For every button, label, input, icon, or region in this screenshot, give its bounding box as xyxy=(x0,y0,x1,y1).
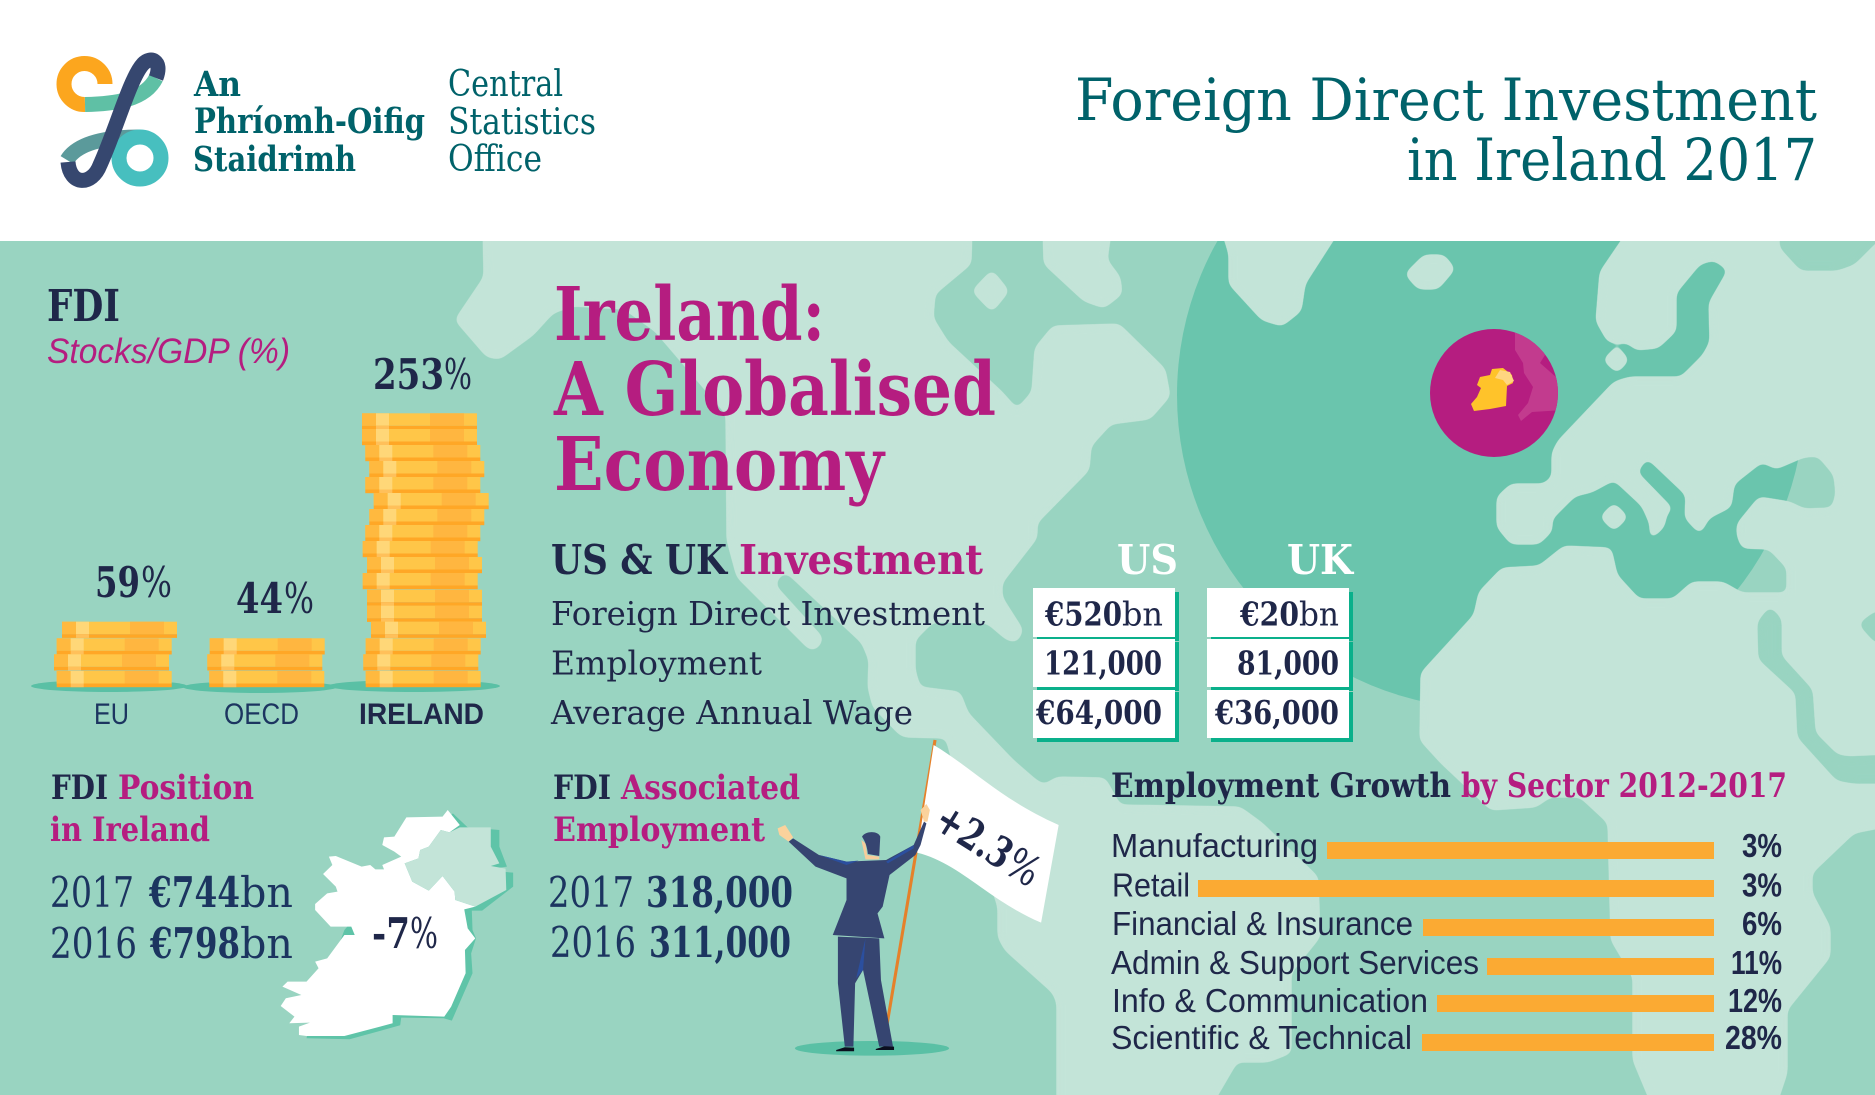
heading: FDI Associated Employment: Associated xyxy=(620,768,800,808)
heading: FDI Associated Employment: Employment xyxy=(553,810,765,850)
heading: FDI Position in Ireland: FDI xyxy=(51,768,108,808)
heading: FDI Position in Ireland: in Ireland xyxy=(50,810,210,850)
title: Foreign Direct Investment xyxy=(1075,66,1817,134)
title xyxy=(1075,66,1817,194)
logo text: Irish: Staidrimh xyxy=(193,139,356,180)
logo text: Irish xyxy=(193,64,425,180)
heading: US & UK Investment: Investment xyxy=(739,536,983,584)
coin stack: OECD xyxy=(207,638,325,687)
row: Manufacturing xyxy=(1111,827,1782,864)
row: Financial & Insurance xyxy=(1112,905,1782,942)
panel: FDI position in Ireland xyxy=(50,768,513,1039)
UK value boxes: 81,000 xyxy=(1237,644,1339,682)
stat: 2016: 311,000 xyxy=(649,918,791,967)
value: 253%: % xyxy=(444,350,472,399)
map: land masses xyxy=(455,225,1875,1095)
heading: FDI Associated Employment: FDI xyxy=(553,768,611,808)
UK value boxes: bn xyxy=(1299,594,1339,634)
stat: 2016: bn xyxy=(240,919,293,968)
value: 44%: 44 xyxy=(236,574,283,623)
heading: FDI: FDI xyxy=(47,281,120,332)
logo text: English xyxy=(448,64,596,180)
subheading: stocks/GDP: Stocks/GDP (%) xyxy=(47,332,290,371)
bar chart xyxy=(1111,827,1782,1056)
title: in Ireland 2017 xyxy=(1407,126,1817,194)
row: Info & Communication: 12% xyxy=(1728,982,1782,1019)
row: Financial & Insurance: Financial & Insurance xyxy=(1112,905,1413,942)
stat: 2017: 2017 xyxy=(548,868,634,917)
row labels: Average Annual Wage xyxy=(550,693,913,732)
value: 253%: 253 xyxy=(373,350,444,399)
heading: US & UK Investment: US & UK xyxy=(551,536,728,584)
flag value: +2.3%: +2.3 xyxy=(927,794,1022,879)
row: Retail xyxy=(1112,866,1782,904)
panel: US and UK investment xyxy=(550,536,1354,742)
world map xyxy=(455,81,1875,1095)
row: Info & Communication xyxy=(1112,982,1782,1019)
stat: 2017: bn xyxy=(240,868,293,917)
US value boxes xyxy=(1033,588,1179,742)
value: 44%: % xyxy=(284,574,314,623)
logo text: English: Central xyxy=(448,64,563,105)
row labels: Foreign Direct Investment xyxy=(551,594,985,633)
panel: employment growth by sector xyxy=(1111,766,1787,1056)
value: 59%: 59 xyxy=(95,558,140,607)
row: Admin & Support Services: 11% xyxy=(1731,944,1782,981)
locator: Northern Ireland xyxy=(1495,370,1514,385)
illustration: man with flag xyxy=(778,740,1059,1056)
row: Admin & Support Services: Admin & Support Services xyxy=(1111,944,1479,981)
column header: UK: UK xyxy=(1287,536,1354,584)
stat: 2016: 2016 xyxy=(50,919,137,968)
logo text: Irish: An xyxy=(193,64,241,105)
value: -7%: % xyxy=(410,909,438,958)
UK value boxes: €36,000 xyxy=(1214,693,1339,732)
heading: US & UK Investment xyxy=(551,536,983,584)
heading: Employment Growth by Sector: Employment Growth xyxy=(1111,766,1451,806)
stat: 2016: €798 xyxy=(149,919,240,968)
row: Manufacturing: Manufacturing xyxy=(1111,827,1318,864)
label: IRELAND: IRELAND xyxy=(359,698,484,731)
coin stack: EU xyxy=(54,622,177,687)
stat: 2016 xyxy=(550,918,791,967)
value: -7%: -7 xyxy=(372,909,410,958)
panel: FDI associated employment xyxy=(548,740,1059,1056)
UK value boxes xyxy=(1207,588,1353,742)
heading: FDI Associated Employment xyxy=(553,768,800,850)
background: sea xyxy=(0,241,1875,1095)
row: Manufacturing: 3% xyxy=(1742,827,1782,864)
coin stack: Ireland xyxy=(362,413,489,687)
heading: Employment Growth by Sector: by Sector 2012-2017 xyxy=(1461,766,1787,806)
map: highlighted sea circle xyxy=(1177,81,1805,709)
US value boxes: €520 xyxy=(1044,594,1122,634)
heading: Employment Growth by Sector xyxy=(1111,766,1787,806)
row: Info & Communication: Info & Communication xyxy=(1112,982,1428,1019)
row: Scientific & Technical xyxy=(1111,1019,1782,1056)
column header: US: US xyxy=(1117,536,1178,584)
row: Scientific & Technical: Scientific & Technical xyxy=(1111,1019,1412,1056)
stat: 2017 xyxy=(50,868,293,917)
main heading: Ireland: xyxy=(554,272,825,358)
logo mark xyxy=(64,60,161,180)
row: Admin & Support Services xyxy=(1111,944,1782,981)
UK value boxes: €20 xyxy=(1239,594,1299,634)
map: inland seas xyxy=(1758,225,1875,783)
value: 59%: % xyxy=(141,558,172,607)
row: Scientific & Technical: 28% xyxy=(1725,1019,1782,1056)
US value boxes: bn xyxy=(1122,594,1163,634)
row labels xyxy=(550,594,985,732)
map of Ireland xyxy=(281,810,513,1039)
stat: 2017: €744 xyxy=(148,868,240,917)
main heading xyxy=(553,272,996,508)
stat: 2016: 2016 xyxy=(550,918,636,967)
label: EU: EU xyxy=(94,698,129,731)
logo text: English: Statistics xyxy=(448,102,596,143)
logo text: English: Office xyxy=(448,139,542,180)
heading: FDI Position in Ireland: Position xyxy=(118,768,254,808)
flag value: +2.3%: % xyxy=(997,838,1050,896)
stat: 2017: 318,000 xyxy=(646,868,793,917)
locator: Ireland xyxy=(1471,368,1513,411)
panel: FDI stocks/GDP xyxy=(31,281,500,731)
stat: 2017 xyxy=(548,868,793,917)
US value boxes: €64,000 xyxy=(1035,693,1162,732)
logo text: Irish: Phríomh-Oifig xyxy=(194,101,425,142)
locator: Great Britain xyxy=(1515,332,1558,421)
main heading: A Globalised xyxy=(553,347,996,433)
label: OECD: OECD xyxy=(224,698,299,731)
row: Retail: 3% xyxy=(1742,866,1782,904)
stat: 2017: 2017 xyxy=(50,868,134,917)
logo xyxy=(64,60,596,180)
header band xyxy=(0,0,1875,241)
US value boxes: 121,000 xyxy=(1044,644,1162,682)
main heading: Economy xyxy=(554,422,886,508)
row labels: Employment xyxy=(551,644,762,682)
row: Financial & Insurance: 6% xyxy=(1742,905,1782,942)
heading: FDI Position in Ireland xyxy=(50,768,254,850)
stat: 2016 xyxy=(50,919,293,968)
shadows under stacks xyxy=(31,680,500,693)
row: Retail: Retail xyxy=(1112,866,1190,904)
locator: Ireland pin circle xyxy=(1430,329,1565,457)
